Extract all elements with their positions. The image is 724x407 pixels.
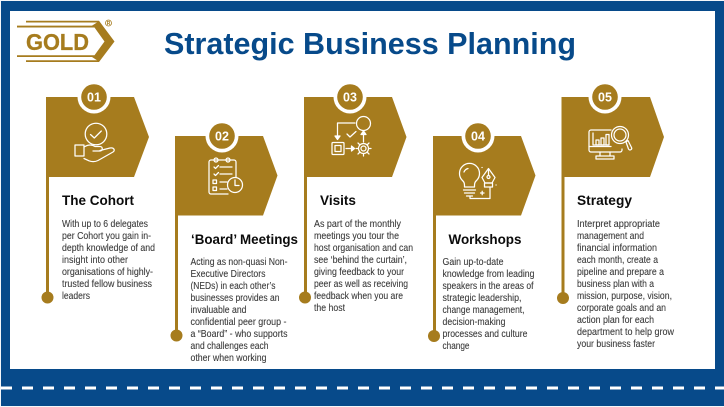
icon: process flow: [332, 116, 371, 156]
panel: 04 Workshops: [428, 120, 536, 352]
body text 04: speakers in the areas of: [442, 281, 534, 292]
body text 02: and challenges each: [190, 341, 268, 352]
body text 04: change management,: [442, 305, 524, 316]
body text 05: Interpret appropriate: [577, 219, 661, 230]
number badge 03: [334, 80, 366, 114]
body text 03: peer as well as receiving: [314, 279, 408, 290]
body text 01: leaders: [62, 291, 90, 302]
logo: GOLD chevron: GOLD: [26, 29, 89, 55]
heading 04: Workshops: [448, 231, 522, 247]
body text 05: business plan with a: [577, 279, 654, 290]
panel: 03 Visits: [299, 80, 413, 314]
body text 03: host organisation and can: [314, 243, 413, 254]
body text 03: the host: [314, 303, 345, 314]
body text 01: insight into other: [62, 255, 129, 266]
body text 03: giving feedback to your: [314, 267, 405, 278]
body text 02: other when working: [190, 353, 266, 364]
icon: hand holding check: [75, 123, 114, 162]
stem dot 03: [299, 292, 311, 304]
body text 05: financial information: [577, 243, 657, 254]
body text 04: change: [442, 341, 470, 352]
body text 01: [62, 219, 155, 302]
heading 02: ‘Board’ Meetings: [191, 231, 298, 247]
body text 05: department to help grow: [577, 327, 675, 338]
body text 01: organisations of highly-: [62, 267, 153, 278]
body text 05: [577, 219, 675, 350]
number badge 02: 02: [215, 130, 229, 144]
stem dot 01: [42, 292, 54, 304]
number badge 04: 04: [471, 130, 485, 144]
body text 02: Acting as non-quasi Non-: [190, 257, 288, 268]
number badge 05: 05: [598, 90, 612, 104]
body text 05: action plan for each: [577, 315, 654, 326]
body text 03: see ‘behind the curtain’,: [314, 255, 407, 266]
heading 01: The Cohort: [62, 192, 134, 208]
body text 05: pipeline and prepare a: [577, 267, 664, 278]
body text 05: mission, purpose, vision,: [577, 291, 672, 302]
number badge 01: [78, 80, 110, 114]
body text 02: [190, 257, 288, 364]
body text 04: knowledge from leading: [442, 269, 534, 280]
stem dot 02: [170, 330, 182, 342]
body text 04: decision-making: [442, 317, 506, 328]
panel: 02 Board Meetings: [170, 120, 298, 364]
body text 01: With up to 6 delegates: [62, 219, 148, 230]
icon: clipboard checklist with clock: [209, 158, 242, 194]
body text 04: processes and culture: [442, 329, 528, 340]
title: Strategic Business Planning: [164, 26, 576, 61]
stem dot 04: [428, 330, 440, 342]
number badge 01: 01: [87, 90, 101, 104]
number badge 02: [206, 120, 238, 152]
number badge 05: [588, 80, 622, 114]
number badge 04: [462, 120, 494, 152]
heading 03: Visits: [320, 192, 356, 208]
flag and stem 01: [46, 97, 149, 297]
flag and stem 05: [562, 97, 664, 298]
heading 05: Strategy: [577, 192, 632, 208]
body text 02: invaluable and: [190, 305, 246, 316]
flag and stem 03: [304, 97, 406, 297]
body text 03: meetings you tour the: [314, 231, 399, 242]
panel: 01 The Cohort: [42, 80, 155, 304]
logo: GOLD chevron: R: [107, 21, 111, 27]
panel: 05 Strategy: [557, 80, 675, 350]
body text 02: confidential peer group -: [190, 317, 286, 328]
body text 03: [314, 219, 413, 314]
body text 04: [442, 257, 534, 352]
body text 04: strategic leadership,: [442, 293, 522, 304]
icon: monitor with magnifier: [589, 126, 632, 159]
body text 04: Gain up-to-date: [442, 257, 504, 268]
body text 03: feedback when you are: [314, 291, 403, 302]
stem dot 05: [557, 292, 569, 304]
logo: GOLD chevron: [17, 20, 114, 62]
body text 02: a “Board” - who supports: [190, 329, 288, 340]
body text 02: businesses provides an: [190, 293, 280, 304]
body text 01: trusted fellow business: [62, 279, 152, 290]
body text 05: corporate goals and an: [577, 303, 666, 314]
body text 05: your business faster: [577, 339, 656, 350]
number badge 03: 03: [343, 90, 357, 104]
body text 02: Executive Directors: [190, 269, 266, 280]
body text 02: (NEDs) in each other’s: [190, 281, 276, 292]
body text 05: each month, create a: [577, 255, 658, 266]
flag and stem 02: [175, 136, 278, 335]
icon: light bulb and pen nib: [459, 163, 496, 198]
body text 01: per Cohort you gain in-: [62, 231, 151, 242]
flag and stem 04: [433, 136, 536, 335]
body text 01: depth knowledge of and: [62, 243, 155, 254]
body text 03: As part of the monthly: [314, 219, 401, 230]
body text 05: management and: [577, 231, 644, 242]
